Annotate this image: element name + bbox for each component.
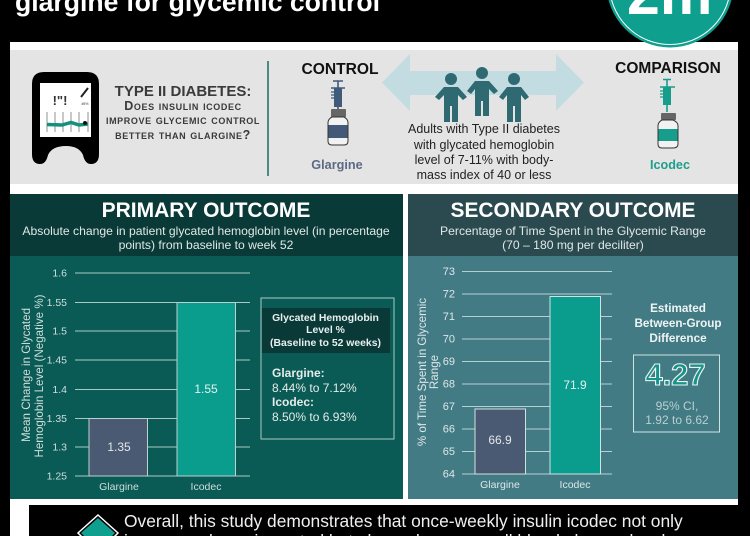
bar chart: primary bbox=[20, 268, 250, 493]
icon: icodec syringe and vial bbox=[658, 80, 678, 148]
heading: secondary outcome: SECONDARY OUTCOME bbox=[451, 199, 696, 222]
heading: type II diabetes question: TYPE II DIABETES: bbox=[115, 83, 251, 100]
bar chart: secondary: 73 bbox=[443, 266, 455, 278]
bar chart: secondary: % of Time Spent in Glycemic bbox=[416, 298, 429, 446]
bar chart: primary: 1.55 bbox=[47, 297, 67, 309]
callout: glycated hemoglobin levels: 8.44% to 7.12% bbox=[272, 381, 357, 395]
control group: Glargine bbox=[311, 158, 363, 172]
primary subtitle bbox=[22, 224, 390, 252]
text: population: Adults with Type II diabetes bbox=[408, 122, 560, 136]
text: population: with glycated hemoglobin bbox=[413, 138, 554, 152]
heading: type II diabetes question: Does insulin icodec bbox=[124, 99, 242, 113]
bar chart: secondary: Glargine bbox=[480, 479, 520, 491]
bar chart: primary: 1.3 bbox=[52, 442, 67, 454]
primary subtitle: Absolute change in patient glycated hemoglobin level (in percentage bbox=[22, 224, 390, 238]
secondary subtitle: (70 – 180 mg per deciliter) bbox=[502, 238, 644, 252]
control group bbox=[301, 61, 379, 172]
callout: between-group difference: Estimated bbox=[650, 302, 706, 315]
bar chart: secondary: 67 bbox=[443, 401, 455, 413]
bar chart: primary: 1.4 bbox=[52, 384, 67, 396]
panel: conclusion bbox=[29, 505, 750, 536]
callout: between-group difference: Difference bbox=[649, 332, 707, 345]
bar chart: secondary: 72 bbox=[443, 288, 455, 300]
bar chart: primary: 1.35 bbox=[107, 440, 131, 454]
bar chart: secondary: 71 bbox=[443, 311, 455, 323]
bar chart: primary: 1.6 bbox=[52, 268, 67, 280]
panel: primary outcome bbox=[10, 194, 403, 499]
text: population bbox=[408, 122, 560, 182]
bar chart: primary: 1.45 bbox=[47, 354, 67, 366]
control group: CONTROL bbox=[301, 61, 379, 78]
heading: type II diabetes question bbox=[106, 83, 260, 142]
callout: between-group difference: 95% CI, bbox=[656, 399, 698, 413]
bar chart: secondary: 64 bbox=[443, 468, 455, 480]
heading: type II diabetes question: better than glargine? bbox=[115, 128, 251, 142]
text: population: level of 7-11% with body- bbox=[415, 153, 553, 167]
bar chart: primary: Mean Change in Glycated bbox=[20, 308, 33, 442]
icon: glucose meter: !"! bbox=[53, 93, 67, 108]
text: population: mass index of 40 or less bbox=[417, 168, 551, 182]
double arrow bbox=[382, 54, 584, 111]
callout: between-group difference: Between-Group bbox=[634, 317, 722, 330]
bar chart: primary: 1.25 bbox=[47, 470, 67, 482]
heading: primary outcome: PRIMARY OUTCOME bbox=[102, 199, 310, 222]
comparison group: COMPARISON bbox=[615, 60, 721, 77]
bar chart: secondary: 66 bbox=[443, 424, 455, 436]
bar chart: secondary: 66.9 bbox=[488, 433, 512, 447]
panel: secondary outcome bbox=[408, 194, 738, 499]
comparison group bbox=[615, 60, 721, 172]
bar chart: secondary: 70 bbox=[443, 334, 455, 346]
bar chart: secondary: Icodec bbox=[560, 479, 590, 491]
bar chart: secondary: 69 bbox=[443, 356, 455, 368]
bar chart: secondary: 71.9 bbox=[563, 378, 587, 392]
callout: glycated hemoglobin levels: 8.50% to 6.93% bbox=[272, 410, 357, 424]
callout: between-group difference: 4.27 bbox=[645, 357, 706, 392]
icon: glucose meter: #5% bbox=[81, 102, 89, 106]
bar chart: primary: Icodec bbox=[191, 481, 221, 493]
secondary subtitle: Percentage of Time Spent in the Glycemic Range bbox=[440, 224, 706, 238]
logo badge bbox=[606, 0, 734, 48]
callout: glycated hemoglobin levels: (Baseline to 52 weeks) bbox=[270, 338, 381, 349]
callout: between-group difference bbox=[634, 302, 722, 432]
callout: glycated hemoglobin levels: Level % bbox=[306, 325, 345, 336]
icon: three people bbox=[435, 67, 529, 122]
panel: study design bbox=[10, 50, 738, 184]
icon: glucose meter bbox=[32, 72, 99, 164]
bar chart: secondary bbox=[416, 266, 612, 491]
conclusion text: Overall, this study demonstrates that once-weekly insulin icodec not only bbox=[124, 511, 683, 531]
bar chart: secondary: 65 bbox=[443, 446, 455, 458]
bar chart: secondary: 68 bbox=[443, 378, 455, 390]
secondary subtitle bbox=[440, 224, 706, 252]
callout: glycated hemoglobin levels: Glargine: bbox=[272, 366, 325, 380]
callout: glycated hemoglobin levels: Icodec: bbox=[272, 395, 314, 409]
bar chart: primary: 1.55 bbox=[194, 382, 218, 396]
primary subtitle: points) from baseline to week 52 bbox=[119, 238, 294, 252]
comparison group: Icodec bbox=[650, 158, 690, 172]
callout: between-group difference: 1.92 to 6.62 bbox=[645, 413, 709, 427]
bar chart: primary: Glargine bbox=[99, 481, 139, 493]
bar chart: primary: 1.35 bbox=[47, 413, 67, 425]
bar chart: primary: 1.5 bbox=[52, 326, 67, 338]
bar chart: primary: Hemoglobin Level (Negative %) bbox=[33, 294, 46, 458]
heading: type II diabetes question: improve glycemic control bbox=[106, 113, 260, 127]
icon: glargine syringe and vial bbox=[328, 81, 348, 145]
icon: diamond bbox=[78, 515, 118, 536]
callout: glycated hemoglobin levels bbox=[261, 298, 394, 439]
bar chart: secondary: Range bbox=[428, 355, 441, 389]
callout: glycated hemoglobin levels: Glycated Hemoglobin bbox=[272, 313, 379, 324]
